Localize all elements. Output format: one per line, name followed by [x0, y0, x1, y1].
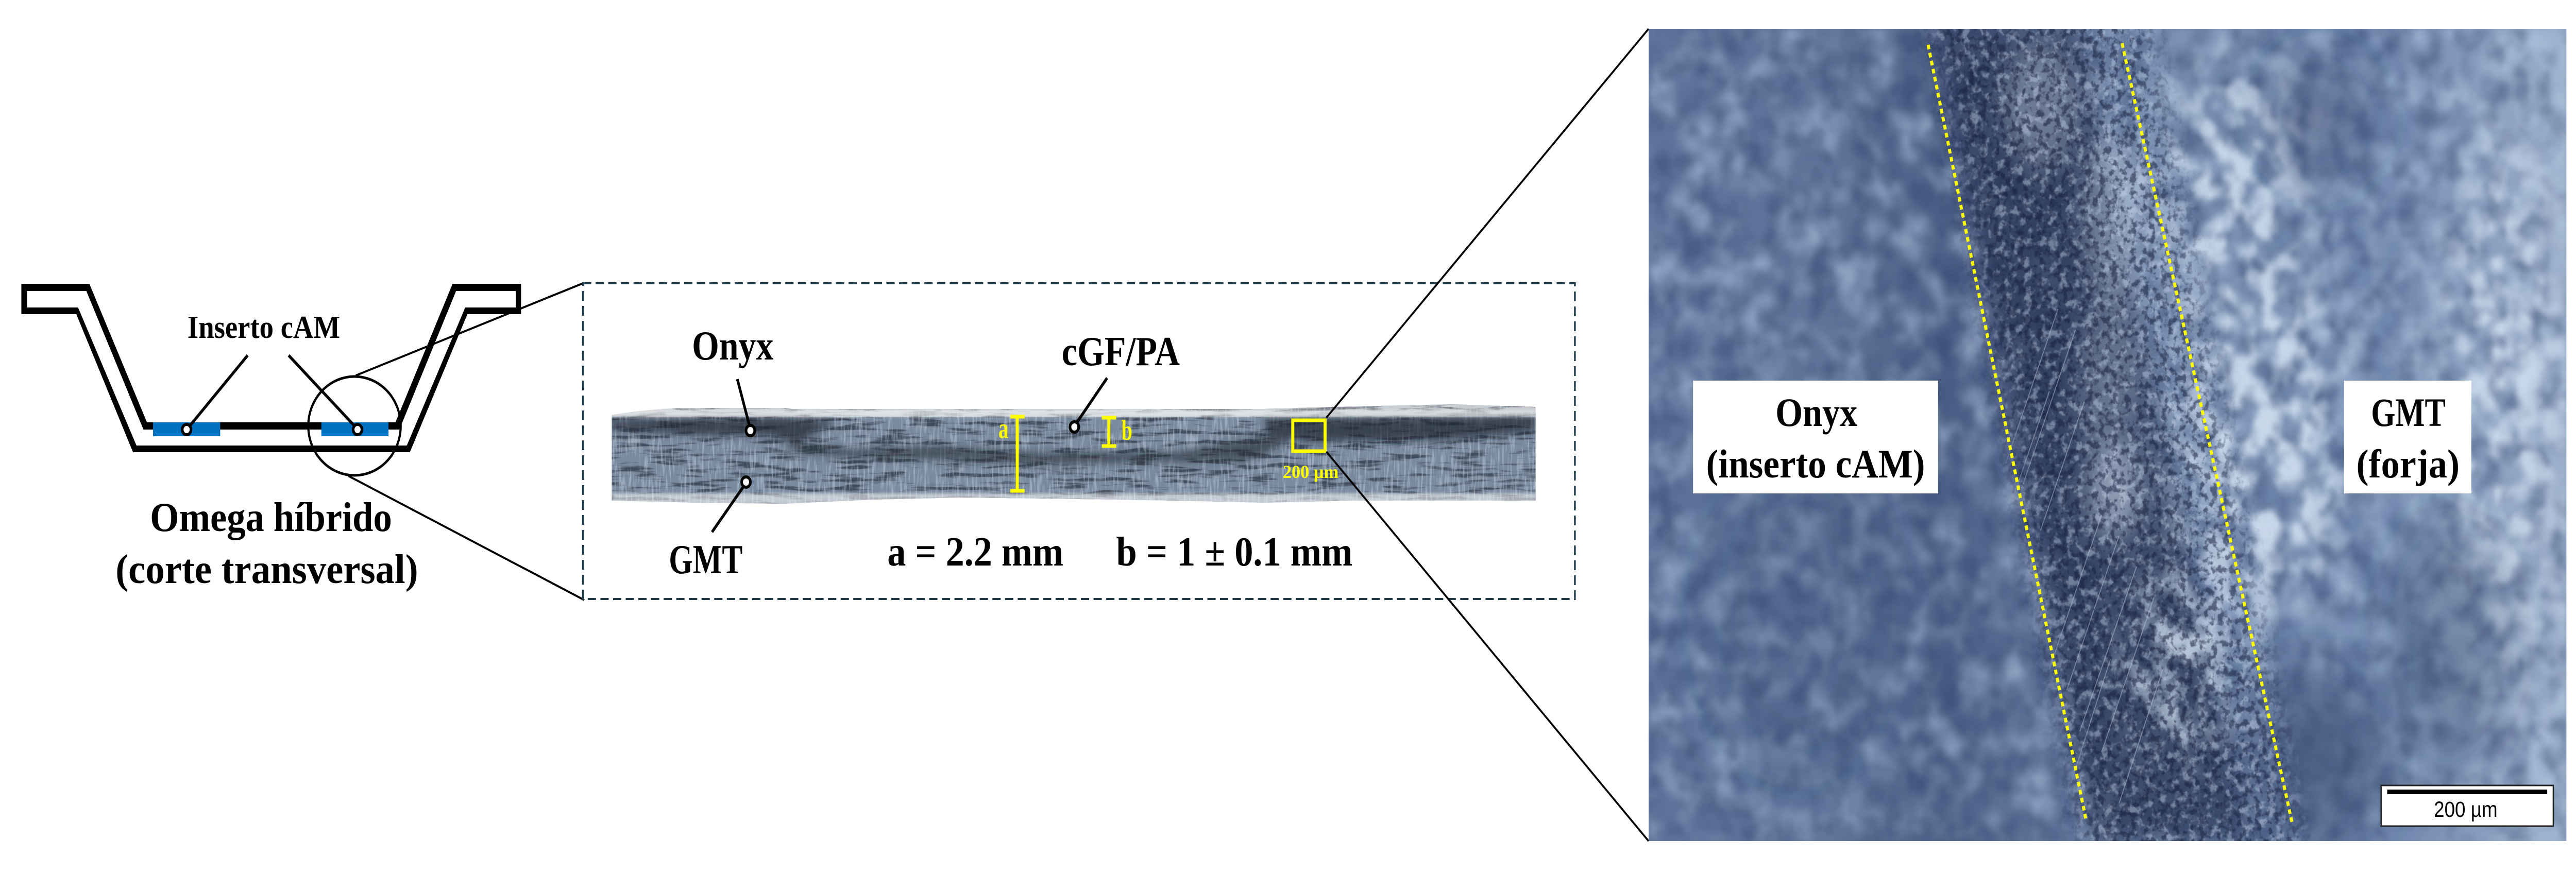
label: GMT: GMT [669, 537, 742, 583]
panel: cross-section micrograph [583, 283, 1575, 599]
detail ellipse [308, 376, 401, 475]
cAM insert, right [321, 422, 388, 436]
label box: GMT (forja): (forja) [2356, 442, 2460, 486]
micrograph strip [612, 404, 1536, 505]
label box: GMT (forja): GMT [2371, 390, 2446, 435]
label: Onyx: Onyx [692, 323, 773, 369]
measurement a: a = 2.2 mm [887, 529, 1063, 575]
micrograph texture [1649, 29, 2566, 855]
yellow dotted interface line 1 [1928, 45, 2087, 821]
scale label: 200 µm: 200 µm [1283, 462, 1338, 483]
heading: Omega híbrido: Omega híbrido [150, 495, 392, 540]
measurement b: b = 1 ± 0.1 mm [1116, 529, 1352, 575]
cAM insert, left [153, 422, 220, 436]
zoom connector lines from square to photo [1326, 29, 1649, 841]
label: cGF/PA: cGF/PA [1062, 329, 1180, 374]
label box: Onyx (inserto cAM): (inserto cAM) [1706, 442, 1925, 486]
panel: interface micrograph [1649, 29, 2566, 855]
yellow dotted interface line 2 [2122, 43, 2292, 823]
label box: Onyx (inserto cAM): Onyx [1775, 390, 1857, 435]
dimension b [1102, 416, 1132, 447]
label: Inserto cAM: Inserto cAM [188, 310, 340, 345]
dimension a: a [998, 414, 1009, 444]
yellow detail square [1293, 420, 1325, 451]
label box: Onyx (inserto cAM) [1693, 381, 1938, 493]
leader lines with markers [712, 378, 1107, 532]
label box: GMT (forja) [2344, 381, 2471, 493]
zoom connector lines from ellipse to panel [348, 283, 584, 600]
scale bar: 200 µm: 200 µm [2434, 797, 2498, 822]
omega hybrid profile [21, 284, 521, 452]
dimension b: b [1122, 416, 1132, 447]
dimension a [998, 414, 1025, 491]
subheading: corte transversal: (corte transversal) [115, 547, 418, 592]
leader lines to inserts [182, 355, 362, 435]
scale bar: 200 µm [2381, 785, 2553, 826]
dashed panel frame [583, 283, 1575, 599]
panel: omega cross-section diagram [21, 284, 521, 592]
